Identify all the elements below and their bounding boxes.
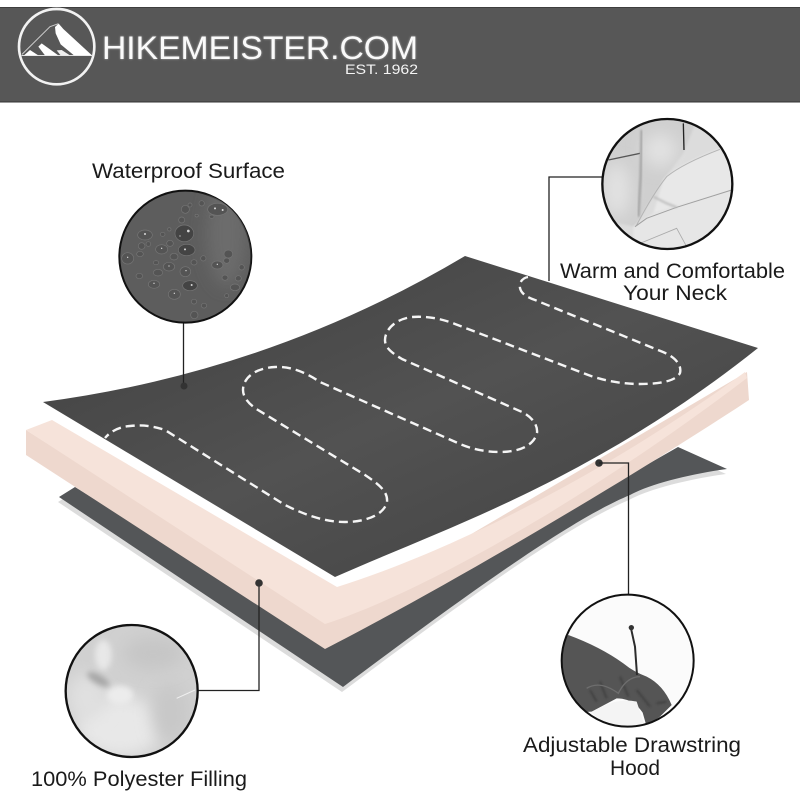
detail circle: drawstring hood	[557, 595, 694, 730]
anchor dot: filling	[255, 579, 263, 587]
label: warm and comfortable your neck	[560, 260, 785, 305]
leader line: filling	[198, 583, 259, 690]
logo tagline: EST. 1962	[345, 62, 418, 77]
label: warm and comfortable your neck: Warm and Comfortable	[560, 260, 785, 283]
layered jacket illustration	[26, 256, 758, 692]
label: warm and comfortable your neck: Your Neck	[623, 282, 728, 305]
logo wordmark: HIKEMEISTER.COM	[102, 30, 418, 66]
filling layer top face	[26, 372, 747, 624]
filling layer front edge	[26, 372, 749, 649]
label: adjustable drawstring hood: Hood	[610, 757, 660, 780]
header banner	[0, 7, 800, 102]
label: waterproof surface: Waterproof Surface	[92, 160, 285, 183]
top outer shell layer	[43, 256, 758, 577]
callout: adjustable drawstring hood	[523, 459, 741, 780]
detail circle: water droplets	[119, 180, 251, 323]
anchor dot: waterproof	[180, 382, 188, 390]
leader line: neck	[549, 177, 603, 281]
anchor dot: hood	[595, 459, 603, 467]
label: polyester filling: 100% Polyester Filling	[31, 768, 247, 791]
logo badge	[19, 9, 94, 84]
leader line: hood	[599, 463, 628, 596]
detail circle: filling fibres	[66, 625, 198, 757]
label: adjustable drawstring hood	[523, 734, 741, 780]
callout: polyester filling	[31, 579, 263, 791]
callout: warm and comfortable	[549, 119, 785, 305]
bottom grey layer underside	[58, 452, 726, 692]
detail circle: quilted lining	[600, 119, 740, 257]
stitching dashed line	[105, 277, 680, 522]
leader line: waterproof	[182, 322, 184, 385]
label: adjustable drawstring hood: Adjustable Drawstring	[523, 734, 741, 757]
bottom grey lining layer	[59, 447, 727, 687]
callout: waterproof surface	[92, 160, 285, 390]
